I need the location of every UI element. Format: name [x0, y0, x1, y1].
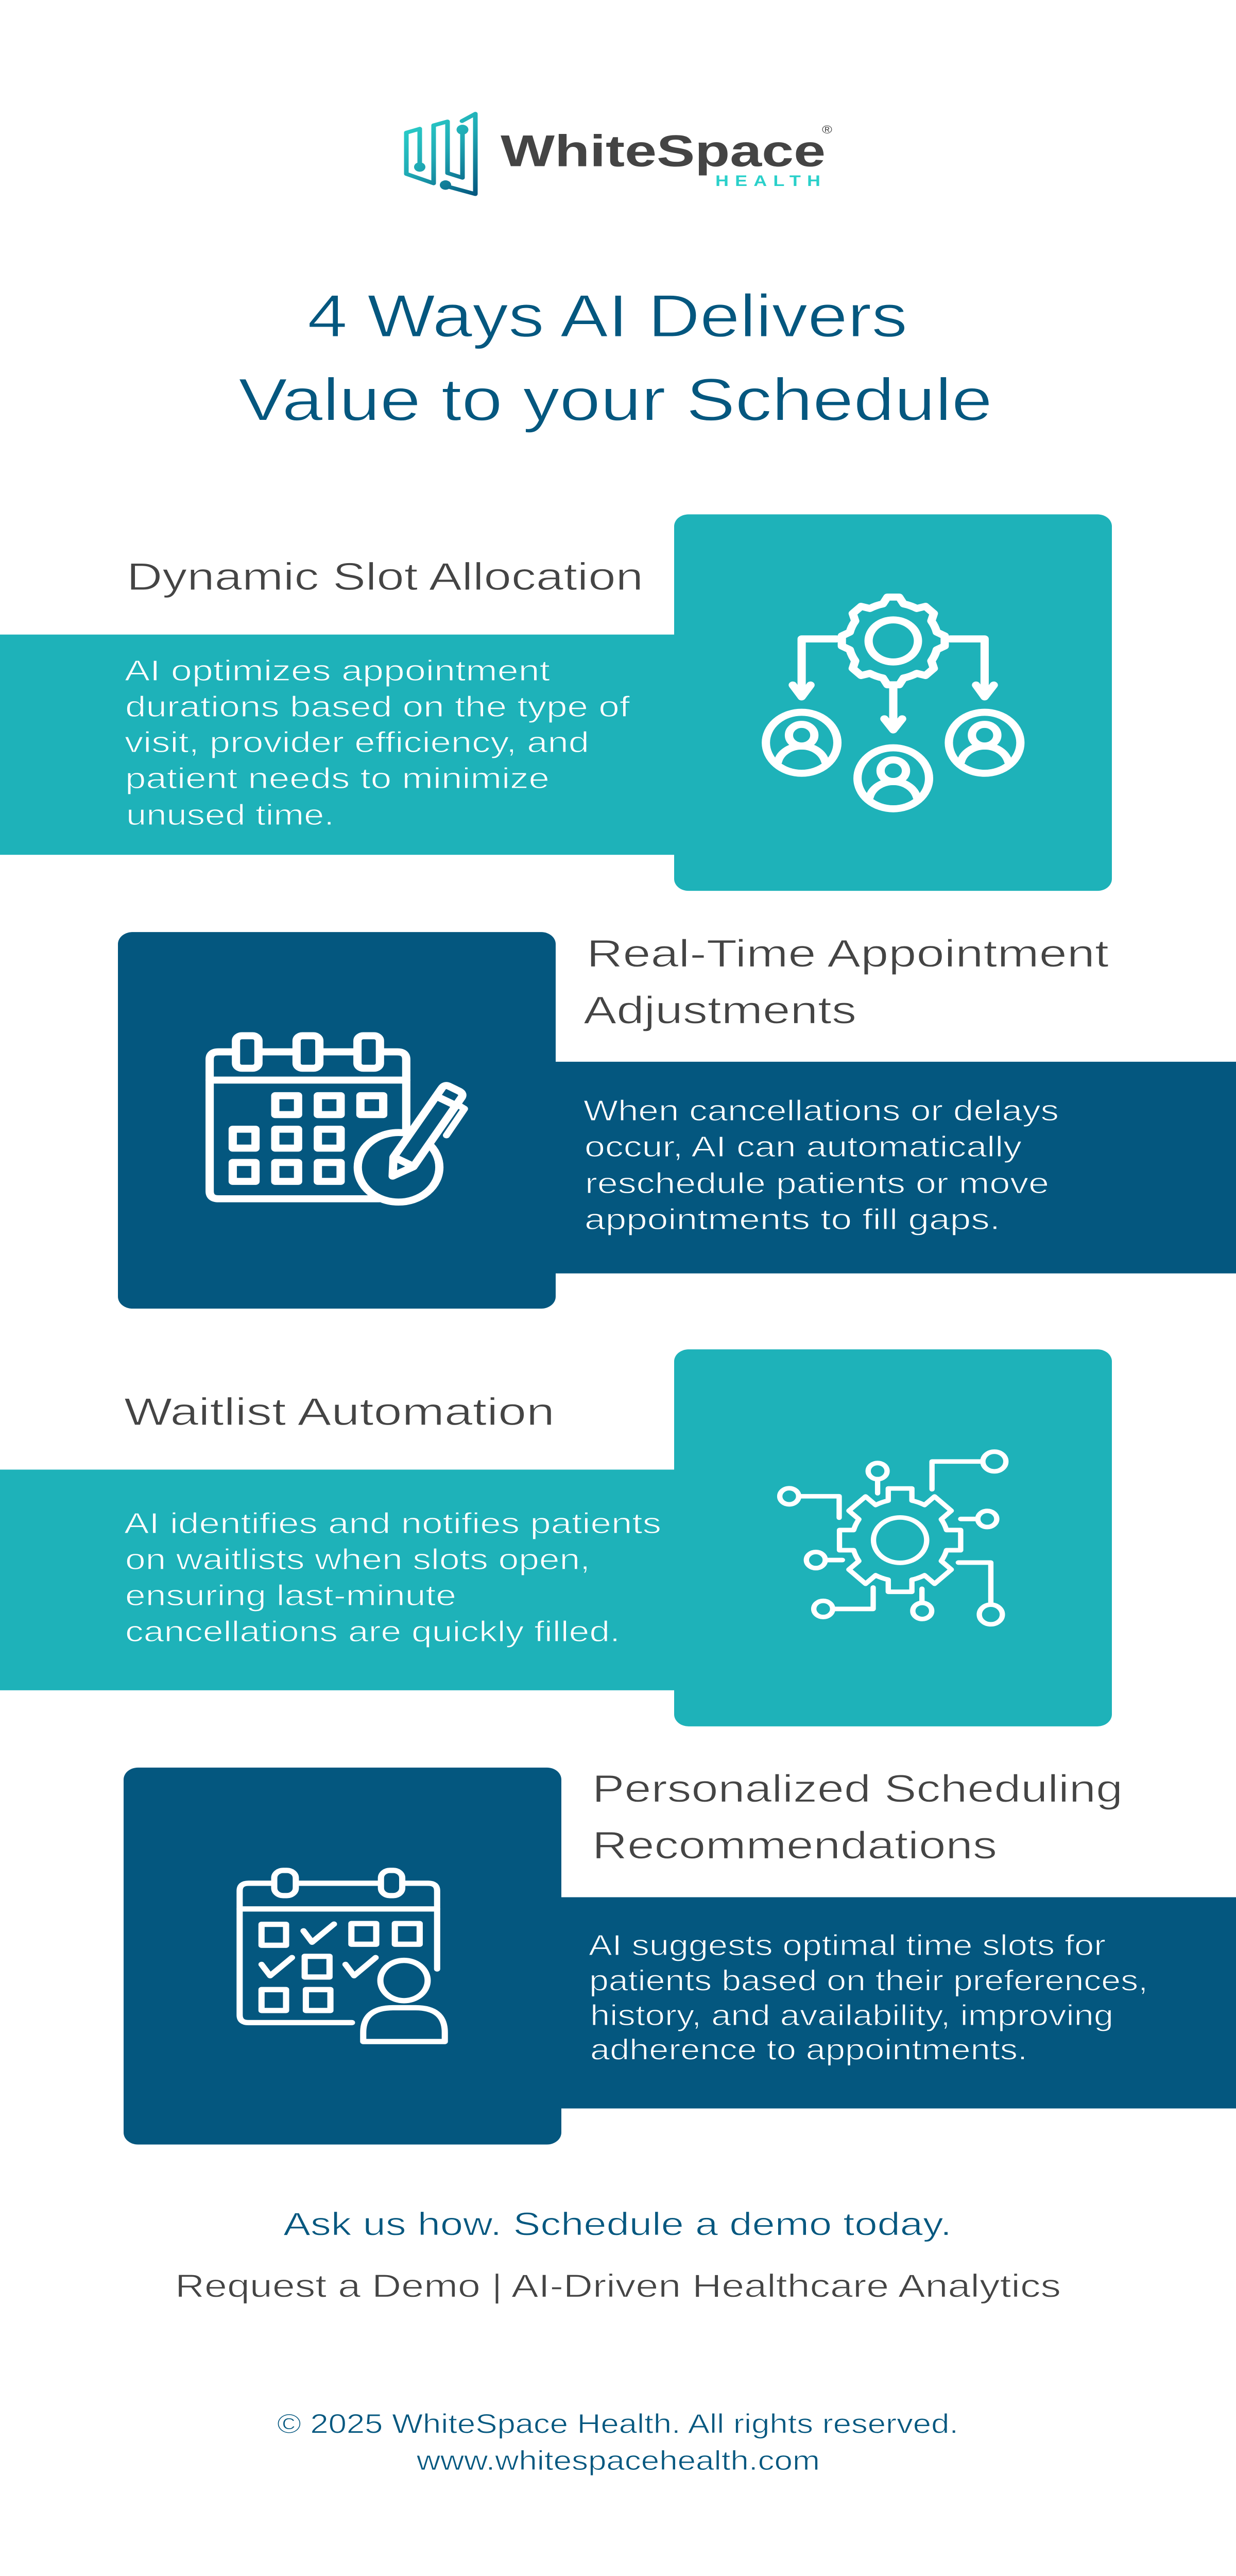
call to action	[175, 2206, 1061, 2304]
icon: gear distributing to three people	[766, 597, 1020, 809]
body text: patients based on their preferences,	[589, 1964, 1148, 1997]
heading: Recommendations	[592, 1824, 997, 1867]
title	[238, 282, 992, 433]
footer	[277, 2409, 958, 2476]
text band	[551, 1897, 1236, 2108]
heading: Real-Time Appointment	[587, 932, 1109, 975]
text band	[546, 1062, 1236, 1274]
heading	[592, 1767, 1123, 1867]
heading: Dynamic Slot Allocation	[127, 555, 643, 598]
logo: WhiteSpace Health	[406, 114, 832, 194]
body text: AI optimizes appointment	[125, 654, 550, 687]
body text: AI identifies and notifies patients	[124, 1507, 661, 1540]
logo subline: HEALTH	[715, 173, 820, 190]
body text: cancellations are quickly filled.	[125, 1615, 620, 1648]
title: 4 Ways AI Delivers	[307, 282, 907, 350]
body text: durations based on the type of	[125, 690, 630, 723]
body text: on waitlists when slots open,	[125, 1543, 590, 1576]
footer: www.whitespacehealth.com	[416, 2446, 820, 2476]
body text: visit, provider efficiency, and	[125, 726, 589, 759]
icon: gear with circuit nodes	[780, 1452, 1006, 1624]
call to action: Request a Demo | AI-Driven Healthcare Analytics	[175, 2267, 1061, 2304]
footer: © 2025 WhiteSpace Health. All rights reserved.	[277, 2409, 958, 2439]
body text: unused time.	[126, 799, 334, 832]
icon card	[674, 514, 1112, 891]
icon: calendar with pencil	[210, 1036, 465, 1202]
body text: ensuring last-minute	[125, 1579, 456, 1612]
icon card	[674, 1349, 1112, 1726]
title: Value to your Schedule	[238, 366, 992, 433]
heading: Adjustments	[583, 989, 856, 1032]
panel: waitlist automation	[0, 1349, 1112, 1726]
body text	[589, 1929, 1148, 2066]
body text: When cancellations or delays	[583, 1094, 1059, 1127]
body text: AI suggests optimal time slots for	[589, 1929, 1106, 1962]
registered mark: ®	[822, 124, 832, 137]
panel: dynamic slot allocation	[0, 514, 1112, 891]
text band	[0, 635, 680, 855]
body text: reschedule patients or move	[585, 1167, 1049, 1200]
heading	[583, 932, 1109, 1032]
call to action: Ask us how. Schedule a demo today.	[283, 2206, 952, 2242]
icon: logo mark	[406, 114, 475, 194]
text band	[0, 1469, 680, 1690]
heading: Personalized Scheduling	[592, 1767, 1123, 1810]
body text	[583, 1094, 1059, 1236]
body text: occur, AI can automatically	[585, 1130, 1022, 1163]
icon: calendar with checkmarks and person	[239, 1870, 445, 2042]
body text	[124, 1507, 661, 1648]
heading: Waitlist Automation	[124, 1390, 555, 1433]
panel: real-time appointment adjustments	[118, 932, 1236, 1309]
body text: adherence to appointments.	[590, 2033, 1027, 2066]
icon card	[124, 1768, 561, 2144]
body text	[125, 654, 630, 832]
body text: history, and availability, improving	[590, 1999, 1113, 2032]
body text: patient needs to minimize	[125, 762, 550, 795]
logo wordmark: WhiteSpace	[501, 126, 826, 176]
panel: personalized scheduling recommendations	[124, 1767, 1236, 2144]
body text: appointments to fill gaps.	[585, 1203, 1000, 1236]
icon card	[118, 932, 556, 1309]
